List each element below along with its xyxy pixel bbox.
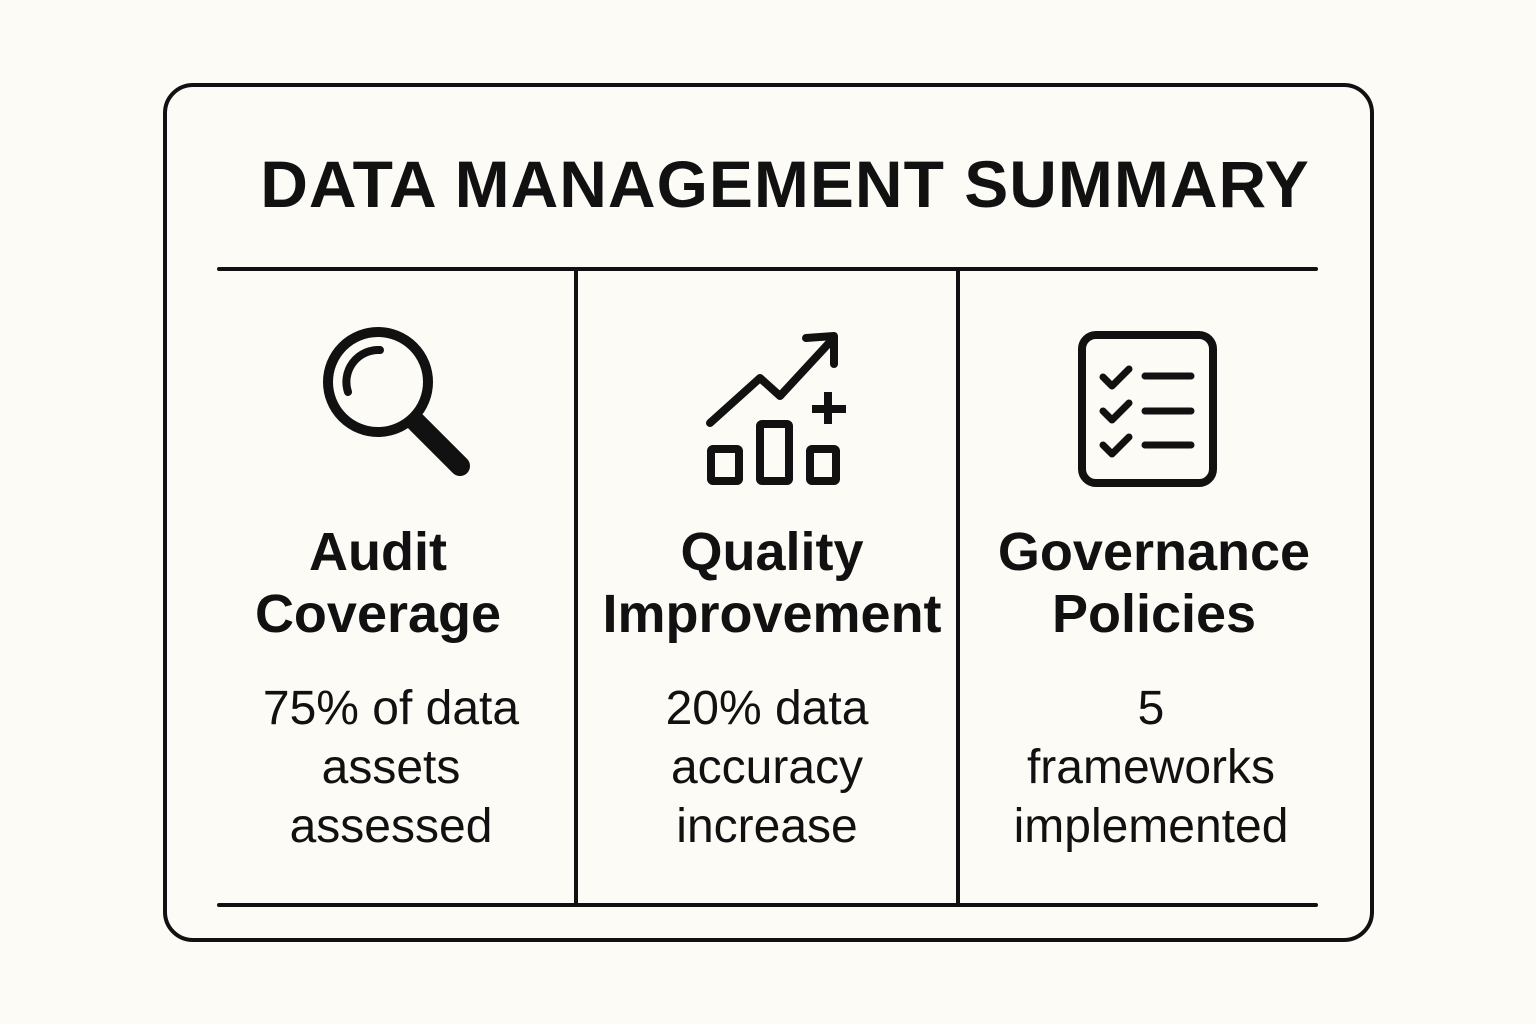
text: quality bbox=[666, 682, 868, 853]
title: DATA MANAGEMENT SUMMARY bbox=[260, 147, 1310, 221]
heading: quality bbox=[602, 522, 942, 644]
heading: governance bbox=[998, 522, 1310, 644]
heading: audit bbox=[255, 522, 501, 644]
heading: quality: Improvement bbox=[602, 584, 942, 644]
icon: checklist bbox=[1078, 331, 1217, 487]
text: audit: assessed bbox=[290, 800, 492, 853]
text: governance: 5 bbox=[1138, 682, 1164, 735]
heading: governance: Governance bbox=[998, 522, 1310, 582]
text: audit: assets bbox=[322, 741, 460, 794]
text: governance bbox=[1014, 682, 1288, 853]
icon: magnifier bbox=[323, 327, 470, 476]
text: governance: frameworks bbox=[1027, 741, 1275, 794]
heading: audit: Audit bbox=[309, 522, 447, 582]
heading: governance: Policies bbox=[1052, 584, 1256, 644]
text: governance: implemented bbox=[1014, 800, 1288, 853]
text: quality: accuracy bbox=[671, 741, 863, 794]
icon: growth chart bbox=[706, 332, 846, 485]
heading: audit: Coverage bbox=[255, 584, 501, 644]
text: quality: increase bbox=[676, 800, 858, 853]
text: audit: 75% of data bbox=[263, 682, 519, 735]
text: quality: 20% data bbox=[666, 682, 868, 735]
heading: quality: Quality bbox=[680, 522, 864, 582]
text: audit bbox=[263, 682, 520, 853]
panel: frame bbox=[163, 83, 1374, 942]
